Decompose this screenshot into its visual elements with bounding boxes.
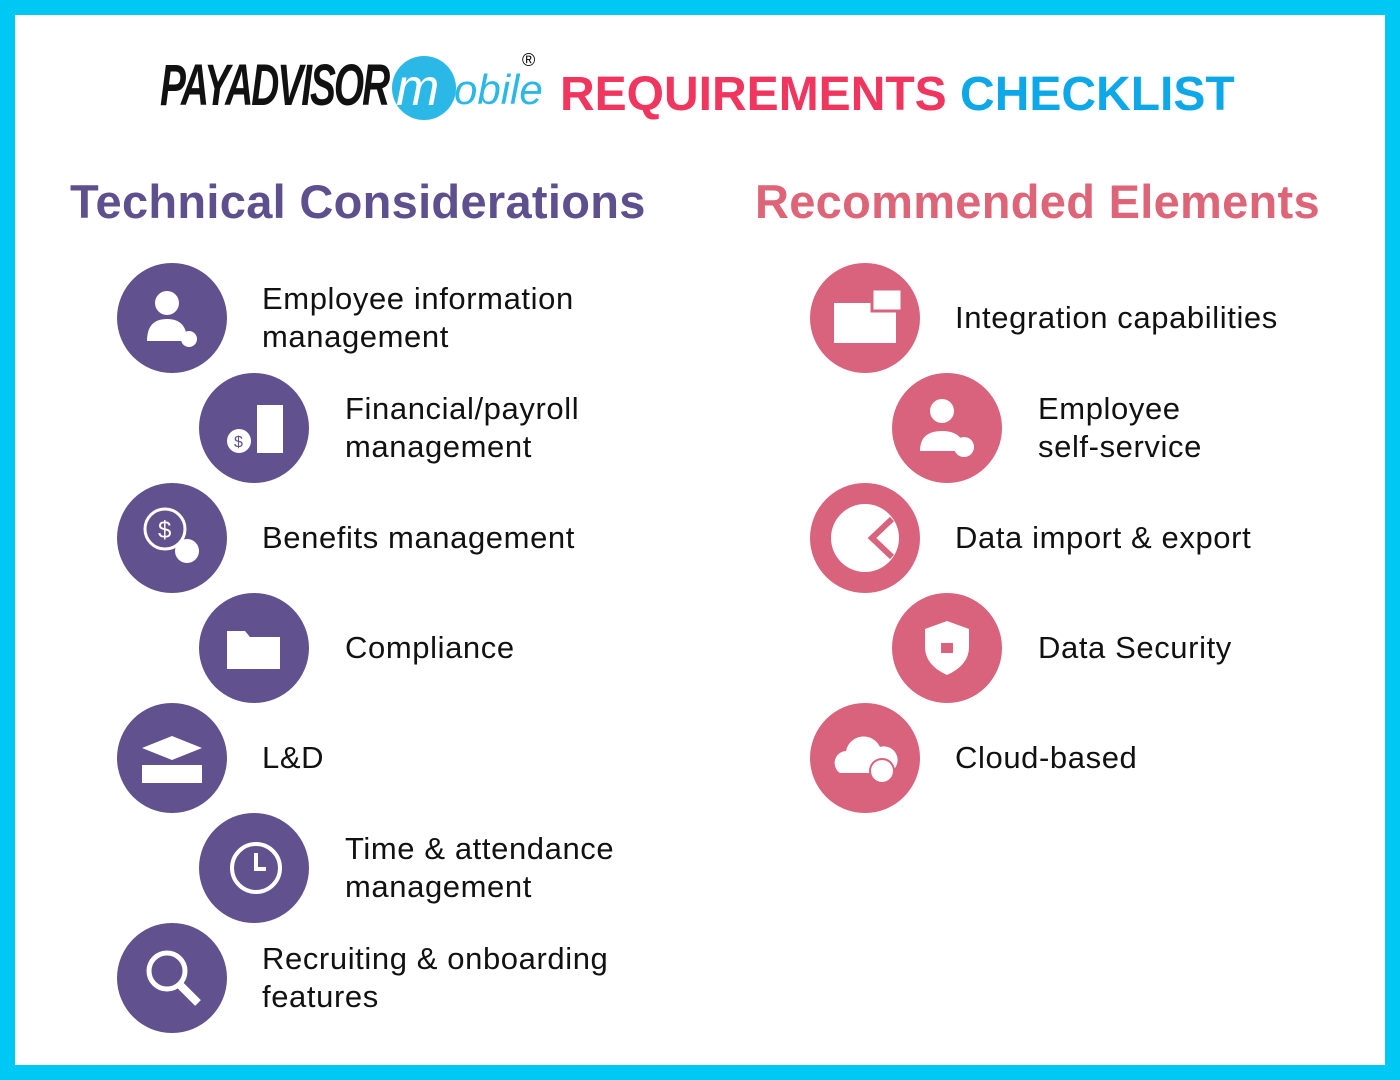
icon: data import	[810, 483, 920, 593]
logo: m	[396, 59, 439, 117]
text: recruiting: features	[262, 979, 379, 1014]
text: cloud: Cloud-based	[955, 740, 1137, 775]
text: financial	[345, 391, 579, 464]
logo: obile	[454, 66, 543, 113]
logo: ®	[522, 50, 535, 70]
text: employee info: management	[262, 319, 449, 354]
text: financial: Financial/payroll	[345, 391, 579, 426]
text: self-service: Employee	[1038, 391, 1181, 426]
text: employee info: Employee information	[262, 281, 574, 316]
panel: recommended list	[810, 263, 1278, 813]
text: time	[345, 831, 614, 904]
text: time: management	[345, 869, 532, 904]
text: security: Data Security	[1038, 630, 1232, 665]
text: self-service	[1038, 391, 1202, 464]
title: REQUIREMENTS CHECKLIST	[560, 68, 1235, 121]
text: recruiting	[262, 941, 608, 1014]
icon: benefits: $	[158, 517, 171, 544]
icon: integration	[810, 263, 920, 373]
icon: security	[892, 593, 1002, 703]
icon: recruiting	[117, 923, 227, 1033]
logo: PAYADVISOR	[160, 53, 388, 118]
text: financial: management	[345, 429, 532, 464]
icon: financial: $	[234, 434, 243, 451]
heading: technical considerations: Technical Considerations	[70, 175, 646, 228]
text: recruiting: Recruiting & onboarding	[262, 941, 608, 976]
icon: L&D	[117, 703, 227, 813]
text: self-service: self-service	[1038, 429, 1202, 464]
panel: technical list	[117, 263, 614, 1033]
icon: benefits	[117, 483, 227, 593]
icon: compliance	[199, 593, 309, 703]
icon: employee info	[117, 263, 227, 373]
text: data import: Data import & export	[955, 520, 1251, 555]
icon: cloud	[810, 703, 920, 813]
icon: financial	[199, 373, 309, 483]
logo	[160, 50, 543, 120]
text: compliance: Compliance	[345, 630, 515, 665]
text: benefits: Benefits management	[262, 520, 575, 555]
text: employee info	[262, 281, 574, 354]
text: integration: Integration capabilities	[955, 300, 1278, 335]
text: time: Time & attendance	[345, 831, 614, 866]
heading: recommended elements: Recommended Elements	[755, 175, 1320, 228]
icon: time	[199, 813, 309, 923]
icon: self-service	[892, 373, 1002, 483]
text: L&D: L&D	[262, 740, 324, 775]
